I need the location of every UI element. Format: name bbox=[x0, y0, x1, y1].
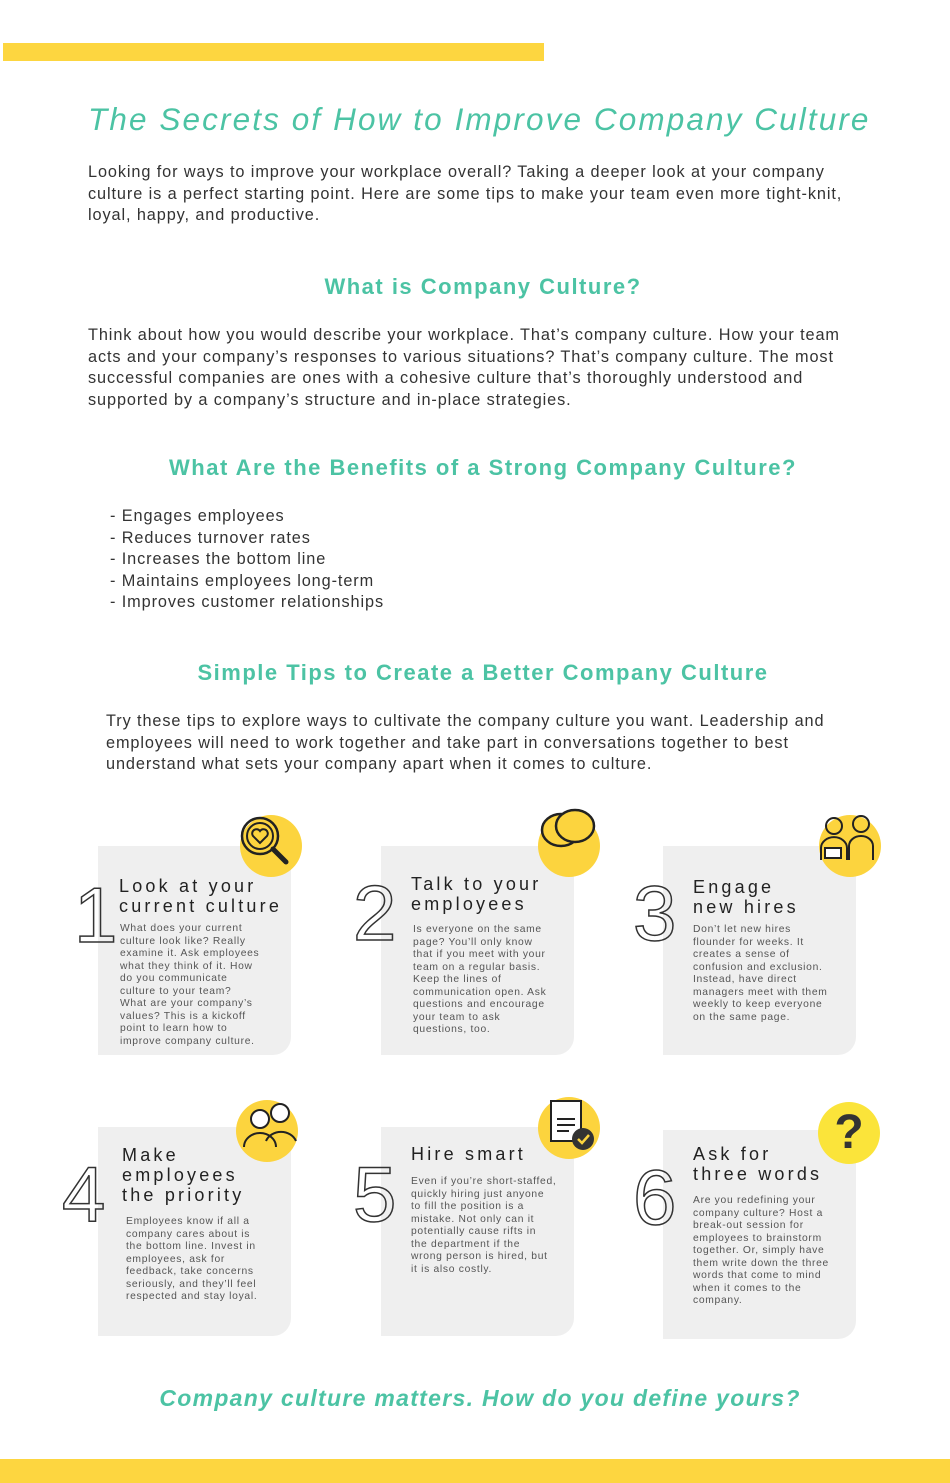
icon: couple bbox=[236, 1100, 298, 1162]
card 3: weekly to keep everyone bbox=[693, 999, 822, 1010]
card 2: Talk to your bbox=[411, 874, 541, 894]
tips intro: Try these tips to explore ways to cultivate the company culture you want. Leadership and bbox=[106, 712, 824, 730]
bottom bar bbox=[0, 1459, 950, 1483]
intro text: culture is a perfect starting point. Here are some tips to make your team even more tight-knit, bbox=[88, 184, 842, 202]
card 1: point to learn how to bbox=[120, 1023, 227, 1034]
card 6: company culture? Host a bbox=[693, 1208, 823, 1218]
icon: speech bubbles bbox=[538, 815, 600, 877]
card 3: Don’t let new hires bbox=[693, 924, 791, 935]
what is text: successful companies are ones with a cohesive culture that’s thoroughly understood and bbox=[88, 369, 803, 387]
tips intro: understand what sets your company apart when it comes to culture. bbox=[106, 755, 652, 773]
card 6: three words bbox=[693, 1164, 822, 1184]
card 1: values? This is a kickoff bbox=[120, 1010, 246, 1022]
card 5: wrong person is hired, but bbox=[411, 1251, 548, 1262]
intro text: Looking for ways to improve your workplace overall? Taking a deeper look at your company bbox=[88, 163, 825, 181]
intro text: loyal, happy, and productive. bbox=[88, 206, 320, 224]
card 4: company cares about is bbox=[126, 1228, 250, 1240]
card 2: that if you meet with your bbox=[413, 949, 546, 960]
card 2: page? You’ll only know bbox=[413, 936, 533, 948]
card 6: words that come to mind bbox=[693, 1270, 821, 1281]
card 1: What does your current bbox=[120, 923, 242, 934]
card 2: questions, too. bbox=[413, 1024, 490, 1035]
card 5: mistake. Not only can it bbox=[411, 1214, 534, 1224]
card 4: seriously, and they’ll feel bbox=[126, 1278, 256, 1290]
card 4 bbox=[63, 1100, 298, 1336]
heading: what is: What is Company Culture? bbox=[324, 274, 642, 299]
card 5 bbox=[355, 1097, 600, 1336]
card 3: creates a sense of bbox=[693, 949, 790, 960]
card 3 bbox=[635, 815, 881, 1055]
what is text bbox=[88, 326, 840, 408]
card 3: new hires bbox=[693, 897, 799, 917]
card 4: the priority bbox=[122, 1185, 244, 1205]
icon: people at laptops bbox=[819, 815, 881, 877]
card 2: team on a regular basis. bbox=[413, 962, 540, 972]
card 6 bbox=[636, 1102, 880, 1339]
title: The Secrets of How to Improve Company Culture bbox=[88, 101, 871, 137]
icon: magnifier heart bbox=[240, 815, 302, 877]
card 3: Instead, have direct bbox=[693, 974, 797, 985]
benefits list: - Reduces turnover rates bbox=[110, 528, 311, 546]
card 3: flounder for weeks. It bbox=[693, 936, 804, 948]
card 1: do you communicate bbox=[120, 973, 228, 984]
card 2: employees bbox=[411, 894, 527, 914]
card 6: them write down the three bbox=[693, 1258, 829, 1268]
benefits list bbox=[110, 507, 384, 611]
card 2: your team to ask bbox=[413, 1012, 500, 1022]
card 3: confusion and exclusion. bbox=[693, 962, 823, 972]
card 4: Make bbox=[122, 1145, 179, 1165]
card 1 bbox=[79, 815, 302, 1055]
card 1: current culture bbox=[119, 896, 282, 916]
card 2: communication open. Ask bbox=[413, 986, 546, 998]
card 4: employees, ask for bbox=[126, 1254, 225, 1264]
tips intro bbox=[106, 712, 824, 773]
tips intro: employees will need to work together and take part in conversations together to best bbox=[106, 734, 789, 752]
card 2: questions and encourage bbox=[413, 999, 545, 1010]
icon: checked document bbox=[538, 1097, 600, 1159]
card 5: Hire smart bbox=[411, 1144, 526, 1164]
heading: benefits: What Are the Benefits of a Strong Company Culture? bbox=[169, 455, 797, 480]
card 5: potentially cause rifts in bbox=[411, 1226, 536, 1237]
closing tagline: Company culture matters. How do you define yours? bbox=[159, 1385, 801, 1411]
card 6: company. bbox=[693, 1295, 742, 1306]
card 4: respected and stay loyal. bbox=[126, 1291, 257, 1302]
card 5: Even if you’re short-staffed, bbox=[411, 1176, 556, 1187]
intro text bbox=[88, 163, 842, 224]
card 1: improve company culture. bbox=[120, 1036, 255, 1046]
card 1: Look at your bbox=[119, 876, 256, 896]
card 2 bbox=[356, 808, 600, 1055]
card 6: Ask for bbox=[693, 1144, 771, 1164]
card 3: on the same page. bbox=[693, 1012, 790, 1022]
card 1: What are your company’s bbox=[120, 998, 253, 1009]
card 6: employees to brainstorm bbox=[693, 1232, 822, 1244]
card 6: together. Or, simply have bbox=[693, 1245, 824, 1256]
card 4: Employees know if all a bbox=[126, 1216, 250, 1227]
benefits list: - Increases the bottom line bbox=[110, 550, 326, 568]
card 5: it is also costly. bbox=[411, 1264, 492, 1274]
benefits list: - Engages employees bbox=[110, 507, 285, 525]
card 1: what they think of it. How bbox=[120, 960, 253, 972]
card 6: Are you redefining your bbox=[693, 1195, 816, 1206]
card 1: culture to your team? bbox=[120, 986, 231, 996]
card 4: the bottom line. Invest in bbox=[126, 1241, 256, 1252]
icon: question mark: ? bbox=[834, 1106, 864, 1159]
card 1: examine it. Ask employees bbox=[120, 948, 259, 959]
card 5: quickly hiring just anyone bbox=[411, 1188, 544, 1200]
card 5: to fill the position is a bbox=[411, 1201, 524, 1212]
icon: question mark bbox=[818, 1102, 880, 1164]
card 1: culture look like? Really bbox=[120, 936, 246, 946]
card 6: break-out session for bbox=[693, 1220, 804, 1231]
card 3: Engage bbox=[693, 877, 774, 897]
what is text: acts and your company’s responses to various situations? That’s company culture. The most bbox=[88, 348, 834, 366]
card 2: Keep the lines of bbox=[413, 974, 502, 985]
what is text: Think about how you would describe your workplace. That’s company culture. How your team bbox=[88, 326, 840, 344]
card 2: Is everyone on the same bbox=[413, 924, 542, 935]
card 4: feedback, take concerns bbox=[126, 1266, 254, 1277]
what is text: supported by a company’s structure and in-place strategies. bbox=[88, 390, 572, 408]
card 6: when it comes to the bbox=[693, 1282, 801, 1294]
benefits list: - Maintains employees long-term bbox=[110, 572, 374, 590]
card 4: employees bbox=[122, 1165, 238, 1185]
card 3: managers meet with them bbox=[693, 986, 828, 998]
card 5: the department if the bbox=[411, 1238, 520, 1250]
heading: tips: Simple Tips to Create a Better Company Culture bbox=[197, 660, 769, 685]
benefits list: - Improves customer relationships bbox=[110, 593, 384, 611]
top bar bbox=[3, 43, 544, 61]
